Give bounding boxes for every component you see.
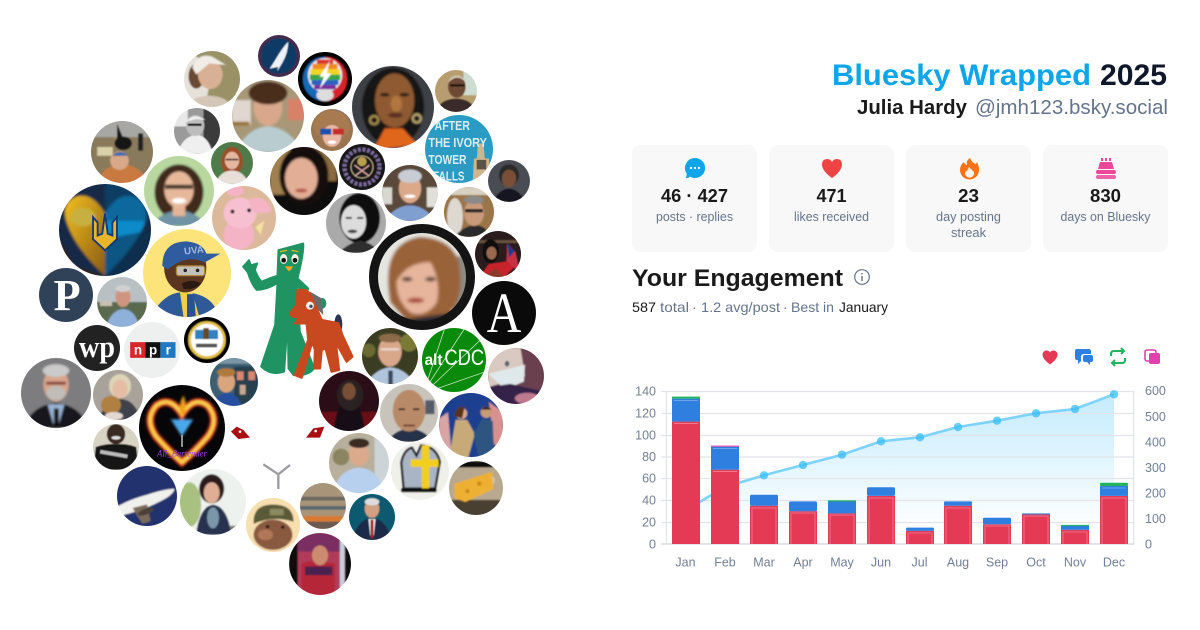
- month labels: Feb: [714, 556, 736, 570]
- stat card: posts and replies: 46 · 427: [661, 186, 728, 206]
- month labels: Apr: [793, 556, 813, 570]
- stat card: likes received: [769, 145, 894, 252]
- avatar: mitre with yellow cross: [385, 436, 455, 506]
- avatar: curly-haired man: [232, 80, 304, 152]
- avatar: woman with small dog: [93, 370, 143, 420]
- avatar: cheese on wrecked car: [444, 456, 508, 520]
- avatar: Pocket P logo: P: [54, 271, 81, 320]
- avatar: smiling woman with glasses: [144, 156, 214, 226]
- bar: Jul: [906, 528, 934, 544]
- right axis labels: 300: [1145, 461, 1166, 475]
- avatar cluster: [14, 31, 550, 601]
- avatar: woman with US flag: [475, 231, 521, 277]
- engagement summary line: ·: [692, 299, 697, 315]
- month labels: Mar: [753, 556, 775, 570]
- month labels: Jun: [871, 556, 891, 570]
- icon: chat bubble: [685, 158, 705, 178]
- bar: May: [828, 500, 856, 544]
- avatar: serif letter A logo: A: [487, 282, 522, 345]
- avatar: red-tinted person: [283, 527, 357, 601]
- avatar: newspaper building: [295, 478, 351, 534]
- user name and handle: Julia Hardy: [857, 97, 968, 119]
- avatar: altCDC logo: CDC: [444, 345, 484, 370]
- avatar: Pocket P logo: [39, 268, 93, 322]
- avatar: black-haired woman: [270, 147, 338, 215]
- stat card: days on Bluesky: 830: [1090, 186, 1121, 206]
- avatar: round badge: [339, 144, 385, 190]
- avatar: older man outdoors: [97, 277, 147, 327]
- left axis labels: 120: [635, 406, 656, 420]
- title: 2025: [1100, 59, 1167, 92]
- engagement summary line: Best in: [791, 299, 834, 315]
- stat card: day posting streak: day posting: [936, 209, 1001, 224]
- user name and handle: [857, 97, 1168, 119]
- stat card: posts and replies: posts · replies: [656, 209, 733, 224]
- avatar: martini fire heart: [139, 385, 225, 471]
- avatar: man with black cat on head: [91, 121, 153, 183]
- avatar: NPR logo: [124, 322, 180, 378]
- left axis labels: [635, 384, 656, 552]
- avatar: black-and-white woman: [326, 193, 386, 253]
- avatar: black-and-white old man: [174, 108, 220, 154]
- legend: quotes: [1145, 350, 1160, 364]
- bar: Sep: [983, 518, 1011, 544]
- avatar: Ukraine trident heart: [59, 184, 151, 276]
- engagement summary line: 1.2 avg/post: [701, 299, 780, 315]
- avatar: airliner on navy: [117, 466, 177, 526]
- engagement summary line: 587: [632, 299, 656, 315]
- avatar: man with towel: [184, 51, 240, 107]
- avatar: NPR logo: n: [134, 342, 142, 357]
- avatar: book cover After the Ivory Tower Falls: TOWER: [428, 152, 467, 167]
- engagement summary line: [632, 299, 888, 315]
- cumulative line: [686, 390, 1118, 510]
- month labels: Aug: [947, 556, 969, 570]
- avatar: Washington Post logo: wp: [79, 330, 115, 364]
- avatar: woman with hoop earrings: [352, 66, 434, 148]
- avatar: man with glasses and tie: [362, 328, 418, 384]
- left axis labels: 0: [649, 538, 656, 552]
- avatar: book cover After the Ivory Tower Falls: FALLS: [433, 168, 465, 183]
- avatar: person beside blue police box: [210, 358, 258, 406]
- chart gridlines and axes: [661, 391, 1134, 544]
- avatar: man in suit on teal: [344, 489, 400, 545]
- legend: likes: [1042, 350, 1058, 364]
- right axis labels: 400: [1145, 436, 1166, 450]
- avatar: book cover After the Ivory Tower Falls: AFTER: [435, 118, 470, 133]
- month labels: Nov: [1064, 556, 1087, 570]
- engagement summary line: ·: [783, 299, 788, 315]
- mascot: green clay figure with orange horse: [243, 243, 352, 378]
- engagement summary line: January: [839, 299, 888, 315]
- avatar: rocket patch: [258, 35, 300, 77]
- right axis labels: 600: [1145, 384, 1166, 398]
- avatar: pig in army helmet: [246, 498, 300, 552]
- icon: heart: [822, 159, 842, 178]
- avatar: woman in fabric close-up: [482, 342, 550, 410]
- stat card: days on Bluesky: days on Bluesky: [1060, 209, 1151, 224]
- month labels: Dec: [1103, 556, 1125, 570]
- avatar: cartoon man in UVA cap: [143, 229, 231, 317]
- chart legend icons: [1042, 348, 1160, 366]
- bar: Aug: [944, 501, 972, 544]
- icon: birthday cake: [1096, 158, 1116, 179]
- avatar: rainbow skull: [298, 52, 352, 106]
- avatar: man in light blue shirt: [323, 427, 395, 499]
- stacked bars: [672, 397, 1128, 544]
- avatar: round seal logo: [184, 317, 230, 363]
- right axis labels: 100: [1145, 512, 1166, 526]
- avatar: serif letter A logo: [472, 281, 536, 345]
- cumulative area: [686, 394, 1114, 544]
- avatar: bald man close-up: [374, 378, 444, 448]
- mascot: red eyes and grey beak: [231, 427, 324, 489]
- avatar: smiling older man: [382, 165, 438, 221]
- month labels: Jul: [912, 556, 927, 570]
- bar: Jun: [867, 487, 895, 544]
- bar: Dec: [1100, 483, 1128, 544]
- avatar: martini fire heart: Ali_Bartender: [156, 449, 207, 459]
- month labels: May: [830, 556, 855, 570]
- month labels: Jan: [675, 556, 696, 570]
- avatar: man in black T-shirt: [93, 424, 139, 470]
- legend: replies: [1075, 349, 1093, 365]
- title: Bluesky Wrapped: [832, 59, 1091, 92]
- stat card: days on Bluesky: [1043, 145, 1168, 252]
- left axis labels: 80: [642, 450, 656, 464]
- avatar: Julia Hardy profile portrait: [369, 224, 475, 330]
- stat card: day posting streak: [906, 145, 1031, 252]
- stat card: likes received: likes received: [794, 209, 869, 224]
- avatar: woman with crossed arms: [180, 469, 246, 535]
- avatar: man with llama: [444, 187, 494, 237]
- right axis labels: 0: [1145, 538, 1152, 552]
- avatar: man with glasses: [435, 70, 477, 112]
- avatar: two people shaking hands with flags: [433, 387, 509, 463]
- engagement summary line: total: [660, 299, 689, 315]
- month labels: [675, 556, 1125, 570]
- stat card: posts and replies: [632, 145, 757, 252]
- heading: Your Engagement: Your Engagement: [632, 265, 843, 292]
- user name and handle: @jmh123.bsky.social: [975, 97, 1168, 119]
- bar: Apr: [789, 501, 817, 544]
- avatar: woman in black on stage: [313, 365, 385, 437]
- right axis labels: 500: [1145, 410, 1166, 424]
- icon: info: [855, 270, 869, 284]
- avatar: grey-haired man in suit: [21, 358, 91, 428]
- bar: Mar: [750, 495, 778, 544]
- stat card: day posting streak: streak: [951, 225, 986, 240]
- left axis labels: 100: [635, 428, 656, 442]
- avatar: altCDC logo: [422, 328, 486, 392]
- icon: flame: [960, 158, 979, 180]
- month labels: Sep: [986, 556, 1008, 570]
- right axis labels: 200: [1145, 486, 1166, 500]
- avatar: pink plush bunny: [212, 186, 276, 250]
- chart: monthly engagement: [635, 384, 1166, 570]
- left axis labels: 40: [642, 494, 656, 508]
- avatar: Washington Post logo: [74, 325, 120, 371]
- stat card: day posting streak: 23: [958, 186, 979, 206]
- bar: Nov: [1061, 525, 1089, 544]
- left axis labels: 140: [635, 384, 656, 398]
- bar: Feb: [711, 446, 739, 544]
- avatar: cartoon man in UVA cap: UVA: [184, 245, 204, 258]
- left axis labels: 60: [642, 472, 656, 486]
- avatar: altCDC logo: alt: [425, 352, 442, 369]
- bar: Jan: [672, 397, 700, 544]
- stat card: likes received: 471: [816, 186, 846, 206]
- legend: reposts: [1111, 348, 1125, 366]
- bar: Oct: [1022, 513, 1050, 544]
- avatar: NPR logo: p: [149, 342, 157, 357]
- avatar: book cover After the Ivory Tower Falls: THE IVORY: [428, 135, 487, 150]
- avatar: NPR logo: r: [166, 342, 172, 357]
- left axis labels: 20: [642, 516, 656, 530]
- avatar: woman in dark portrait: [488, 160, 530, 202]
- right axis labels: [1145, 384, 1166, 552]
- month labels: Oct: [1026, 556, 1046, 570]
- avatar: woman in 3D glasses: [311, 109, 353, 151]
- avatar: book cover After the Ivory Tower Falls: [425, 115, 493, 183]
- avatar: red-haired woman: [211, 142, 253, 184]
